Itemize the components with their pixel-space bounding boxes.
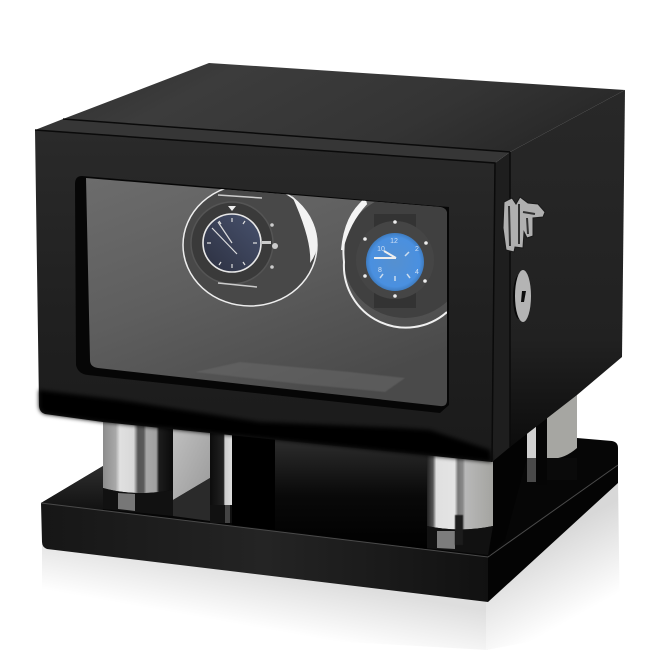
pillar: back right — [527, 385, 577, 485]
right watch: 10 — [377, 246, 385, 253]
pillar: front right — [427, 440, 493, 555]
right watch: 4 — [415, 269, 419, 276]
right winder drum — [341, 200, 447, 329]
keyhole plate — [513, 270, 531, 322]
winder box — [35, 63, 625, 462]
latch hardware — [503, 197, 545, 252]
glass window — [75, 176, 467, 413]
right watch: 2 — [415, 246, 419, 253]
floor shadow — [42, 480, 620, 650]
left winder drum — [183, 184, 317, 306]
glossy lower band — [39, 390, 492, 462]
base top left reflection — [41, 466, 103, 512]
base front face — [41, 503, 488, 602]
dial numerals: 12 — [390, 238, 398, 245]
pillar: front left — [103, 415, 173, 516]
seams — [35, 119, 510, 462]
box right side — [510, 90, 625, 447]
right watch: 8 — [378, 267, 382, 274]
box top — [63, 63, 625, 152]
lid strip — [35, 119, 510, 163]
left watch — [191, 195, 278, 287]
base right face — [488, 465, 618, 602]
base plinth — [41, 425, 618, 602]
base top surface — [41, 425, 618, 557]
right watch — [363, 214, 428, 308]
corner strip — [492, 152, 510, 462]
underside gap between pillars — [173, 425, 527, 556]
box front — [35, 130, 495, 462]
base front highlight edge — [41, 465, 618, 557]
pillar: back left — [210, 425, 232, 523]
reflection in glass — [195, 362, 405, 392]
